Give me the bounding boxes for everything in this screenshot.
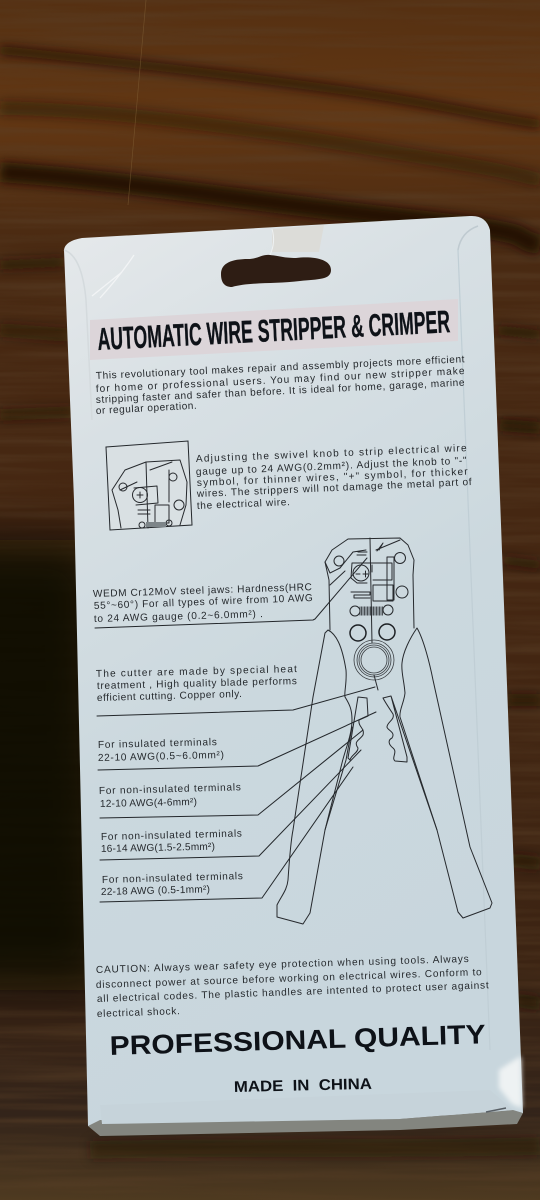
- knob instructions paragraph: the electrical wire.: [197, 497, 290, 512]
- right handle: [400, 628, 492, 918]
- knob instructions paragraph: symbol, for thinner wires, "+" symbol, for thicker: [197, 467, 469, 489]
- inset diagram: swivel knob detail: [106, 441, 192, 530]
- callout: non-insulated 22-18 text: 22-18 AWG (0.5-1mm²): [101, 884, 210, 898]
- made in china: MADE IN CHINA: [234, 1076, 372, 1096]
- intro paragraph: for home or professional users. You may find our new stripper make: [96, 366, 465, 395]
- callout leader: non-insulated 22-18: [100, 767, 353, 902]
- intro paragraph: [96, 354, 465, 417]
- callout: non-insulated 22-18 text: [101, 871, 243, 898]
- callout: cutter text: efficient cutting. Copper only.: [97, 689, 242, 704]
- rivets: [350, 624, 395, 641]
- head outline: [325, 538, 414, 630]
- callout: insulated terminals text: 22-10 AWG(0.5~6.0mm²): [98, 750, 224, 764]
- callout leader: cutter: [97, 687, 375, 716]
- callout: non-insulated 16-14 text: 16-14 AWG(1.5-2.5mm²): [101, 842, 215, 855]
- callout: insulated terminals text: For insulated terminals: [98, 737, 217, 751]
- callout: non-insulated 22-18 text: For non-insulated terminals: [102, 871, 243, 886]
- caution paragraph: CAUTION: Always wear safety eye protection when using tools. Always: [96, 954, 469, 976]
- callout leader: non-insulated 12-10: [100, 730, 363, 818]
- caution paragraph: disconnect power at source before working on electrical wires. Conform to: [96, 967, 482, 991]
- caution paragraph: electrical shock.: [97, 1006, 180, 1020]
- callout leader: non-insulated 16-14: [100, 750, 361, 860]
- callout: cutter text: treatment , High quality blade performs: [97, 676, 297, 692]
- knob instructions paragraph: [196, 443, 472, 512]
- packaging card: [64, 216, 523, 1136]
- knob instructions paragraph: wires. The strippers will not damage the metal part of: [196, 477, 472, 500]
- callout leader: steel jaws: [95, 558, 367, 628]
- tool diagram: wire stripper and crimper: [277, 538, 492, 924]
- title band: [90, 299, 458, 360]
- right jaw: [383, 696, 437, 830]
- spring: [350, 605, 393, 616]
- caution paragraph: all electrical codes. The plastic handles are intented to protect user against: [97, 980, 489, 1005]
- callout: steel jaws text: [93, 582, 313, 625]
- callout: non-insulated 12-10 text: [99, 782, 241, 810]
- intro paragraph: This revolutionary tool makes repair and assembly projects more efficient: [96, 354, 465, 382]
- hang hole: [221, 255, 331, 287]
- left jaw: [325, 675, 378, 830]
- knob instructions paragraph: gauge up to 24 AWG(0.2mm²). Adjust the knob to "-": [196, 456, 467, 478]
- left handle: [277, 630, 352, 924]
- callout: non-insulated 12-10 text: 12-10 AWG(4-6mm²): [100, 797, 197, 810]
- pivot: [354, 640, 394, 680]
- professional quality heading: PROFESSIONAL QUALITY: [109, 1019, 486, 1061]
- knob instructions paragraph: Adjusting the swivel knob to strip electrical wire: [196, 443, 467, 465]
- callout: steel jaws text: 55°~60°) For all types of wire from 10 AWG: [94, 593, 313, 612]
- callout: insulated terminals text: [98, 737, 224, 764]
- callout: cutter text: [96, 664, 297, 704]
- callout: steel jaws text: to 24 AWG gauge (0.2~6.0mm²) .: [94, 609, 263, 625]
- caution paragraph: [96, 954, 489, 1020]
- intro paragraph: or regular operation.: [96, 401, 197, 417]
- callout: non-insulated 16-14 text: For non-insulated terminals: [101, 829, 242, 843]
- callout: non-insulated 12-10 text: For non-insulated terminals: [99, 782, 241, 797]
- callout: steel jaws text: WEDM Cr12MoV steel jaws: Hardness(HRC: [93, 582, 312, 600]
- callout leader: insulated terminals: [98, 712, 376, 770]
- intro paragraph: stripping faster and safer than before. It is ideal for home, garage, marine: [96, 378, 465, 406]
- callout: cutter text: The cutter are made by special heat: [96, 664, 297, 680]
- callout: non-insulated 16-14 text: [101, 829, 242, 855]
- head internals: [325, 538, 408, 643]
